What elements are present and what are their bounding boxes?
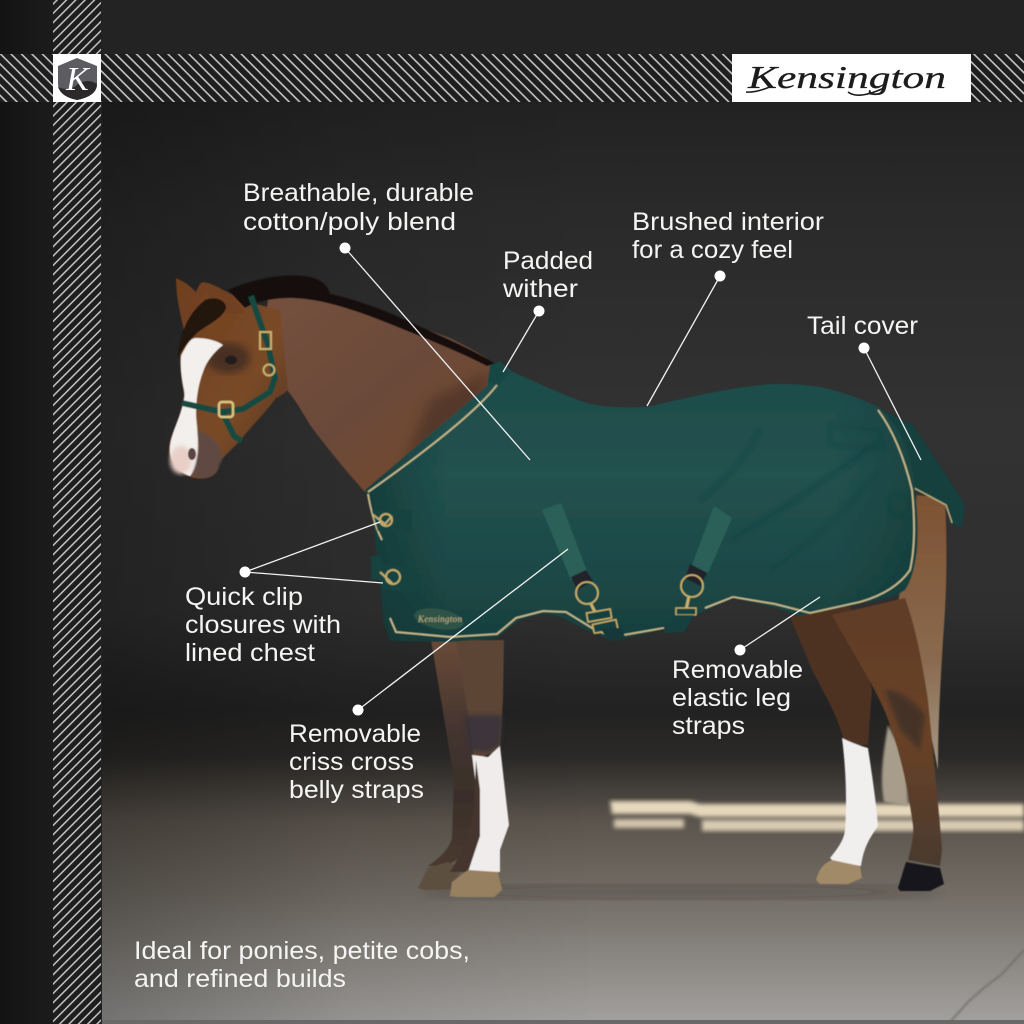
near foreleg [450, 640, 509, 897]
callout: elastic leg straps: straps [672, 712, 745, 740]
brand logo: Kensington [747, 59, 946, 95]
far hind leg [790, 606, 878, 884]
wither pad [488, 361, 509, 386]
callout: quick clip closures: closures with [185, 611, 341, 639]
callout: belly straps: belly straps [289, 776, 424, 804]
callout: elastic leg straps: elastic leg [672, 684, 791, 712]
callout: breathable blend: Breathable, durable [243, 179, 474, 207]
neck and body [262, 298, 497, 492]
horizontal stripe band [0, 54, 1024, 102]
brand logo [732, 54, 971, 102]
ear [203, 282, 244, 314]
chest shadow [400, 370, 492, 470]
callout: belly straps: Removable [289, 720, 421, 748]
horse illustration [169, 275, 965, 899]
eye shadow [206, 343, 250, 373]
footer note: and refined builds [134, 965, 346, 993]
callout: belly straps: criss cross [289, 748, 414, 776]
horse shadow [420, 885, 940, 899]
belly strap one [542, 503, 626, 640]
callout: breathable blend [243, 179, 530, 460]
callout: elastic leg straps [672, 597, 820, 740]
forelock [178, 298, 226, 358]
rug logo patch: Kensington [417, 614, 462, 624]
callout: belly straps [289, 549, 568, 804]
eye [225, 356, 237, 364]
mane [228, 275, 495, 366]
icon: shield: K [65, 61, 91, 98]
callout: padded wither: wither [502, 275, 578, 303]
callout: padded wither: Padded [503, 247, 593, 275]
callout: tail cover [807, 312, 921, 460]
halter [182, 296, 275, 441]
far foreleg [418, 640, 480, 890]
callout: padded wither [502, 247, 593, 372]
footer note [134, 937, 470, 993]
tail flap [877, 408, 965, 527]
rug body [365, 362, 918, 642]
piping [368, 385, 914, 637]
fabric folds [700, 425, 910, 570]
callout: quick clip closures: lined chest [185, 639, 315, 667]
blaze [170, 338, 223, 476]
rug logo patch [413, 605, 465, 633]
head [169, 278, 288, 478]
callout: elastic leg straps: Removable [672, 656, 803, 684]
logo badge [53, 54, 101, 102]
tail [882, 495, 946, 806]
callout: brushed interior [632, 208, 824, 406]
near hind leg [832, 598, 944, 891]
callout: breathable blend: cotton/poly blend [243, 208, 456, 236]
vertical stripe band [53, 0, 101, 1024]
callout: brushed interior: Brushed interior [632, 208, 824, 236]
floor light strips [610, 801, 1024, 831]
callout: tail cover: Tail cover [807, 312, 918, 340]
muzzle [192, 430, 222, 478]
callout: brushed interior: for a cozy feel [632, 236, 793, 264]
callout: quick clip closures: Quick clip [185, 583, 303, 611]
green rug [365, 361, 965, 642]
footer note: Ideal for ponies, petite cobs, [134, 937, 470, 965]
callout: quick clip closures [185, 522, 383, 667]
belly strap two [662, 506, 732, 633]
chest closures [371, 509, 418, 592]
